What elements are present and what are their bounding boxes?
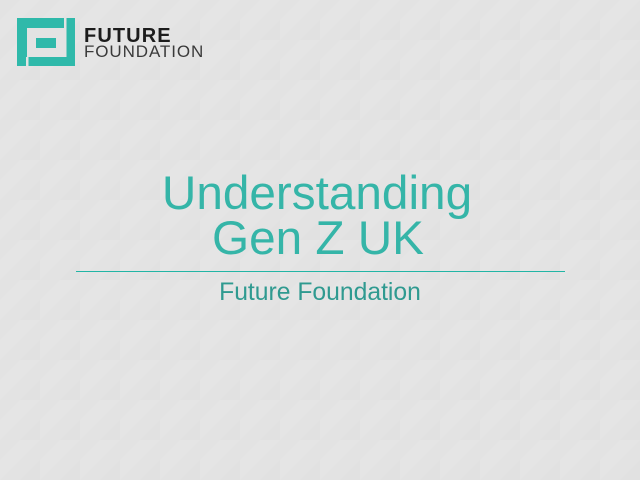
title line 1: Understanding — [162, 167, 472, 220]
icon: logo mark — [17, 18, 75, 66]
logo word: FUTURE: FUTURE — [84, 25, 172, 47]
divider line — [76, 271, 565, 272]
title line 2: Gen Z UK — [212, 212, 424, 265]
subtitle: Future Foundation — [219, 279, 421, 306]
logo: Future Foundation — [17, 18, 204, 66]
logo word: FOUNDATION: FOUNDATION — [84, 42, 204, 61]
